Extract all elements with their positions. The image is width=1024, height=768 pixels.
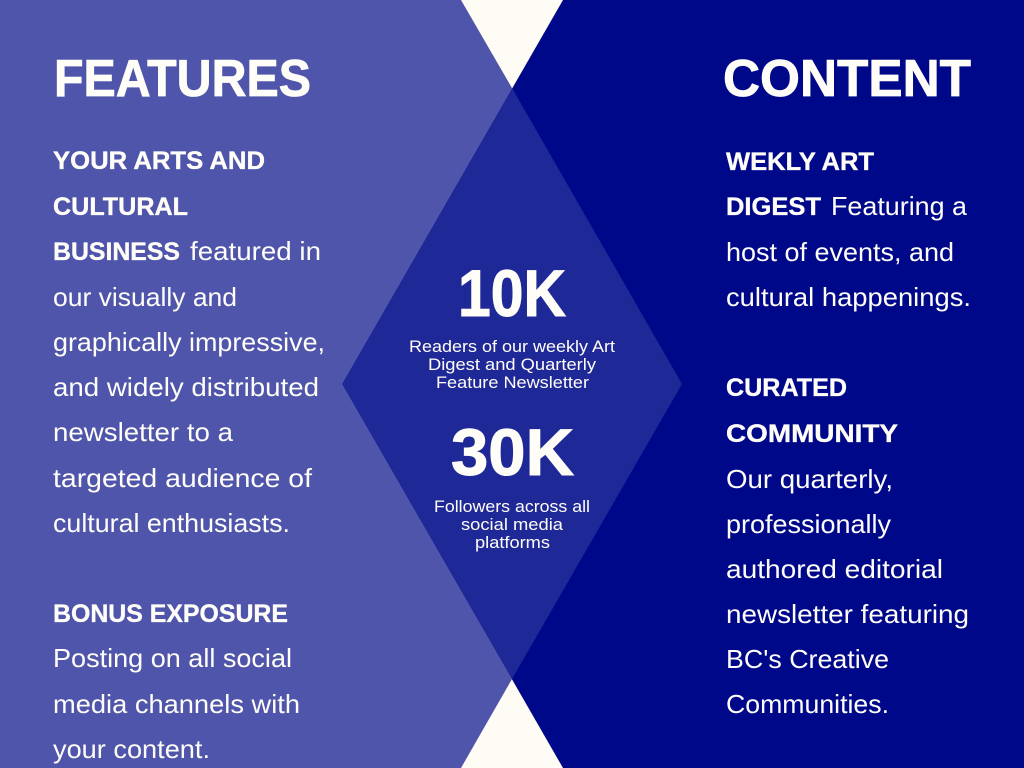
heading: features: FEATURES [54,50,311,108]
text block: arts and cultural business: cultural enthusiasts. [53,508,290,538]
text block: arts and cultural business: and widely distributed [53,372,319,402]
text block: curated community: authored editorial [726,554,943,584]
text block: weekly art digest: cultural happenings. [726,282,971,312]
caption: readers: Digest and Quarterly [428,355,597,374]
stat: 10K readers [409,256,615,392]
caption: followers [434,497,590,552]
text block: curated community: CURATED [726,374,847,402]
text block: arts and cultural business: BUSINESS [53,238,180,266]
text block: arts and cultural business: featured in [190,236,321,266]
text block: bonus exposure: your content. [53,734,210,764]
caption: readers: Feature Newsletter [436,373,589,392]
text block: bonus exposure: Posting on all social [53,643,292,673]
panel: features text [53,50,325,764]
text block: weekly art digest: Featuring a [831,191,968,221]
text block: arts and cultural business: graphically impressive, [53,327,325,357]
text block: weekly art digest: host of events, and [726,237,954,267]
text block: curated community: newsletter featuring [726,599,969,629]
number: 30K: 30K [451,415,574,489]
text block: arts and cultural business [53,147,325,538]
text block: weekly art digest: DIGEST [726,193,821,221]
caption: followers: social media [461,515,564,534]
panel: content text [723,50,971,719]
text block: arts and cultural business: targeted audience of [53,463,313,493]
text block: bonus exposure: BONUS EXPOSURE [53,600,288,628]
text block: curated community: Communities. [726,689,889,719]
text block: curated community: BC's Creative [726,644,889,674]
text block: bonus exposure [53,600,300,764]
number: 10K: 10K [458,256,566,330]
caption: followers: Followers across all [434,497,590,516]
text block: bonus exposure: media channels with [53,689,300,719]
text block: weekly art digest [726,148,971,312]
text block: weekly art digest: WEKLY ART [726,148,874,176]
caption: followers: platforms [475,533,550,552]
text block: arts and cultural business: our visually and [53,282,237,312]
caption: readers: Readers of our weekly Art [409,337,615,356]
text block: curated community: COMMUNITY [726,420,898,448]
text block: arts and cultural business: newsletter to a [53,417,234,447]
text block: arts and cultural business: YOUR ARTS AND [53,147,265,175]
stat: 30K followers [434,415,590,552]
panel: content background [342,0,1024,768]
heading: content: CONTENT [723,50,971,108]
text block: curated community: professionally [726,509,891,539]
text block: arts and cultural business: CULTURAL [53,193,188,221]
panel: central overlap diamond [342,88,682,679]
panel: features background [0,0,512,768]
caption: readers [409,337,615,392]
text block: curated community [726,374,969,719]
text block: curated community: Our quarterly, [726,464,893,494]
